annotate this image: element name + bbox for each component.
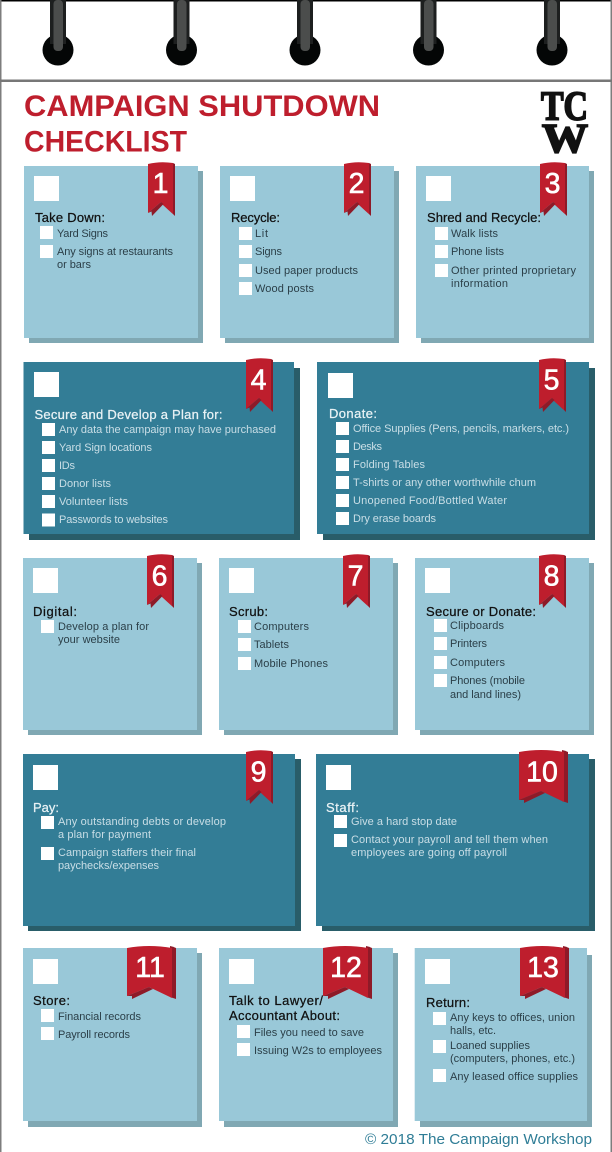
checklist items: Phones (mobile (450, 675, 525, 687)
ribbon 12: 12 (330, 952, 362, 984)
checkbox (34, 372, 59, 397)
title: CAMPAIGN SHUTDOWN (24, 90, 380, 123)
checklist items: Payroll records (58, 1029, 130, 1041)
checklist items: Office Supplies (Pens, pencils, markers, etc.) (353, 423, 569, 435)
ribbon 9 (246, 750, 273, 804)
checklist items: Yard Signs (57, 228, 108, 240)
panel: step 9 pay (23, 750, 301, 931)
heading: Digital: (33, 604, 77, 619)
checklist items: Other printed proprietary (451, 265, 576, 277)
checklist items (238, 620, 328, 670)
heading: Shred and Recycle: (427, 210, 541, 225)
panel: step 7 scrub (219, 554, 398, 735)
checklist items: Printers (450, 638, 488, 650)
ribbon 11: 11 (135, 952, 165, 984)
heading: Secure or Donate: (426, 604, 536, 619)
heading: Staff: (326, 800, 359, 815)
heading: Talk to Lawyer/ (229, 993, 323, 1008)
checklist items (435, 227, 576, 290)
heading: Pay: (33, 800, 59, 815)
ribbon 6: 6 (152, 560, 167, 592)
checkbox (326, 765, 351, 790)
ribbon 7 (343, 554, 370, 608)
ribbon 3 (540, 162, 567, 216)
panel: step 12 talk to lawyer (219, 946, 398, 1127)
logo: TCW: W (542, 115, 588, 161)
checklist items (42, 423, 276, 526)
checklist items: Dry erase boards (353, 513, 436, 525)
checklist items: IDs (59, 460, 76, 472)
checklist items: Lit (255, 228, 268, 240)
checklist items (336, 422, 569, 525)
checklist items: information (451, 278, 508, 290)
ribbon 2: 2 (349, 168, 364, 200)
checklist items: Volunteer lists (59, 496, 128, 508)
ribbon 10: 10 (526, 756, 558, 788)
checklist items (41, 816, 226, 872)
checklist items: Walk lists (451, 228, 498, 240)
logo: TCW: TC (541, 82, 588, 128)
panel: step 13 return (415, 946, 592, 1127)
panel: step 12 talk to lawyer: Accountant About: (229, 1008, 340, 1023)
checklist items: Any keys to offices, union (450, 1012, 575, 1024)
ribbon 5 (539, 358, 566, 412)
heading: Return: (426, 995, 470, 1010)
logo: TCW (541, 82, 588, 161)
checklist items: your website (58, 634, 120, 646)
heading: Store: (33, 993, 70, 1008)
checkbox (229, 568, 254, 593)
panel: step 11 store (23, 946, 202, 1127)
ribbon 9: 9 (251, 756, 266, 788)
checklist items: Files you need to save (254, 1027, 364, 1039)
checklist items: Any outstanding debts or develop (58, 816, 226, 828)
checklist items: Yard Sign locations (59, 442, 152, 454)
checklist items: Phone lists (451, 246, 504, 258)
checklist items: a plan for payment (58, 829, 151, 841)
checklist items (41, 1009, 142, 1041)
ribbon 5: 5 (544, 364, 559, 396)
ribbon 13 (520, 946, 569, 999)
title (24, 90, 380, 158)
checklist items: Wood posts (255, 283, 314, 295)
ribbon 13: 13 (527, 952, 559, 984)
spiral binding rings (42, 0, 568, 66)
checklist items: and land lines) (450, 689, 521, 701)
checkbox (33, 959, 58, 984)
ribbon 8 (539, 554, 566, 608)
ribbon 6 (147, 554, 174, 608)
checklist items: Financial records (58, 1011, 142, 1023)
checklist items (334, 815, 548, 859)
panel: step 1 take down (24, 162, 203, 343)
ribbon 10 (519, 750, 568, 803)
checklist items: Loaned supplies (450, 1040, 530, 1052)
checklist items: Passwords to websites (59, 514, 168, 526)
checklist items: Signs (255, 246, 282, 258)
checklist items: Any leased office supplies (450, 1071, 578, 1083)
checklist items: Folding Tables (353, 459, 426, 471)
checklist items: halls, etc. (450, 1025, 496, 1037)
checklist items: Computers (254, 621, 310, 633)
panel: step 4 secure and develop a plan (24, 358, 300, 540)
heading: Scrub: (229, 604, 268, 619)
ribbon 2 (344, 162, 371, 216)
panel: step 2 recycle (220, 162, 399, 343)
title: CHECKLIST (24, 126, 187, 158)
ribbon 4 (246, 358, 273, 412)
checklist items: Desks (353, 441, 382, 453)
checklist items: Unopened Food/Bottled Water (353, 495, 507, 507)
checkbox (33, 765, 58, 790)
checklist items: Mobile Phones (254, 658, 328, 670)
checkbox (426, 176, 451, 201)
checklist items: employees are going off payroll (351, 847, 507, 859)
ribbon 7: 7 (348, 560, 363, 592)
checklist items: (computers, phones, etc.) (450, 1053, 575, 1065)
checkbox (425, 568, 450, 593)
checklist items: Any signs at restaurants (57, 246, 174, 258)
checklist items (41, 620, 149, 646)
heading: Take Down: (35, 210, 105, 225)
checklist items: Used paper products (255, 265, 358, 277)
checklist items: Issuing W2s to employees (254, 1045, 382, 1057)
checklist items: Computers (450, 657, 506, 669)
checklist items: Clipboards (450, 620, 504, 632)
checklist items: paychecks/expenses (58, 860, 160, 872)
panel: step 6 digital (23, 554, 202, 735)
checklist items: or bars (57, 259, 92, 271)
checklist items (433, 1012, 578, 1083)
panel: step 8 secure or donate (415, 554, 594, 735)
checklist items: Campaign staffers their final (58, 847, 196, 859)
ribbon 3: 3 (545, 168, 560, 200)
ribbon 11 (127, 946, 176, 999)
ribbon 8: 8 (544, 560, 559, 592)
checklist items: T-shirts or any other worthwhile chum (353, 477, 536, 489)
ribbon 1: 1 (153, 168, 168, 200)
ribbon 12 (323, 946, 372, 999)
checkbox (229, 959, 254, 984)
checklist items: Any data the campaign may have purchased (59, 424, 276, 436)
checklist items (434, 619, 525, 701)
footer copyright: © 2018 The Campaign Workshop (365, 1132, 592, 1148)
checkbox (425, 959, 450, 984)
heading: Recycle: (231, 210, 280, 225)
checklist items: Give a hard stop date (351, 816, 457, 828)
checklist items: Donor lists (59, 478, 112, 490)
panel: step 10 staff (316, 750, 595, 931)
heading: Donate: (329, 406, 377, 421)
checklist items (239, 227, 358, 295)
ribbon 4: 4 (251, 364, 267, 396)
checkbox (230, 176, 255, 201)
heading: Secure and Develop a Plan for: (34, 407, 222, 422)
checklist items (237, 1025, 382, 1057)
checklist items (40, 226, 174, 271)
checklist items: Tablets (254, 639, 290, 651)
checklist items: Contact your payroll and tell them when (351, 834, 548, 846)
checkbox (328, 373, 353, 398)
checklist items: Develop a plan for (58, 621, 149, 633)
ribbon 1 (148, 162, 175, 216)
checkbox (33, 568, 58, 593)
checkbox (34, 176, 59, 201)
panel: step 3 shred and recycle (416, 162, 594, 343)
panel: step 5 donate (317, 358, 595, 540)
